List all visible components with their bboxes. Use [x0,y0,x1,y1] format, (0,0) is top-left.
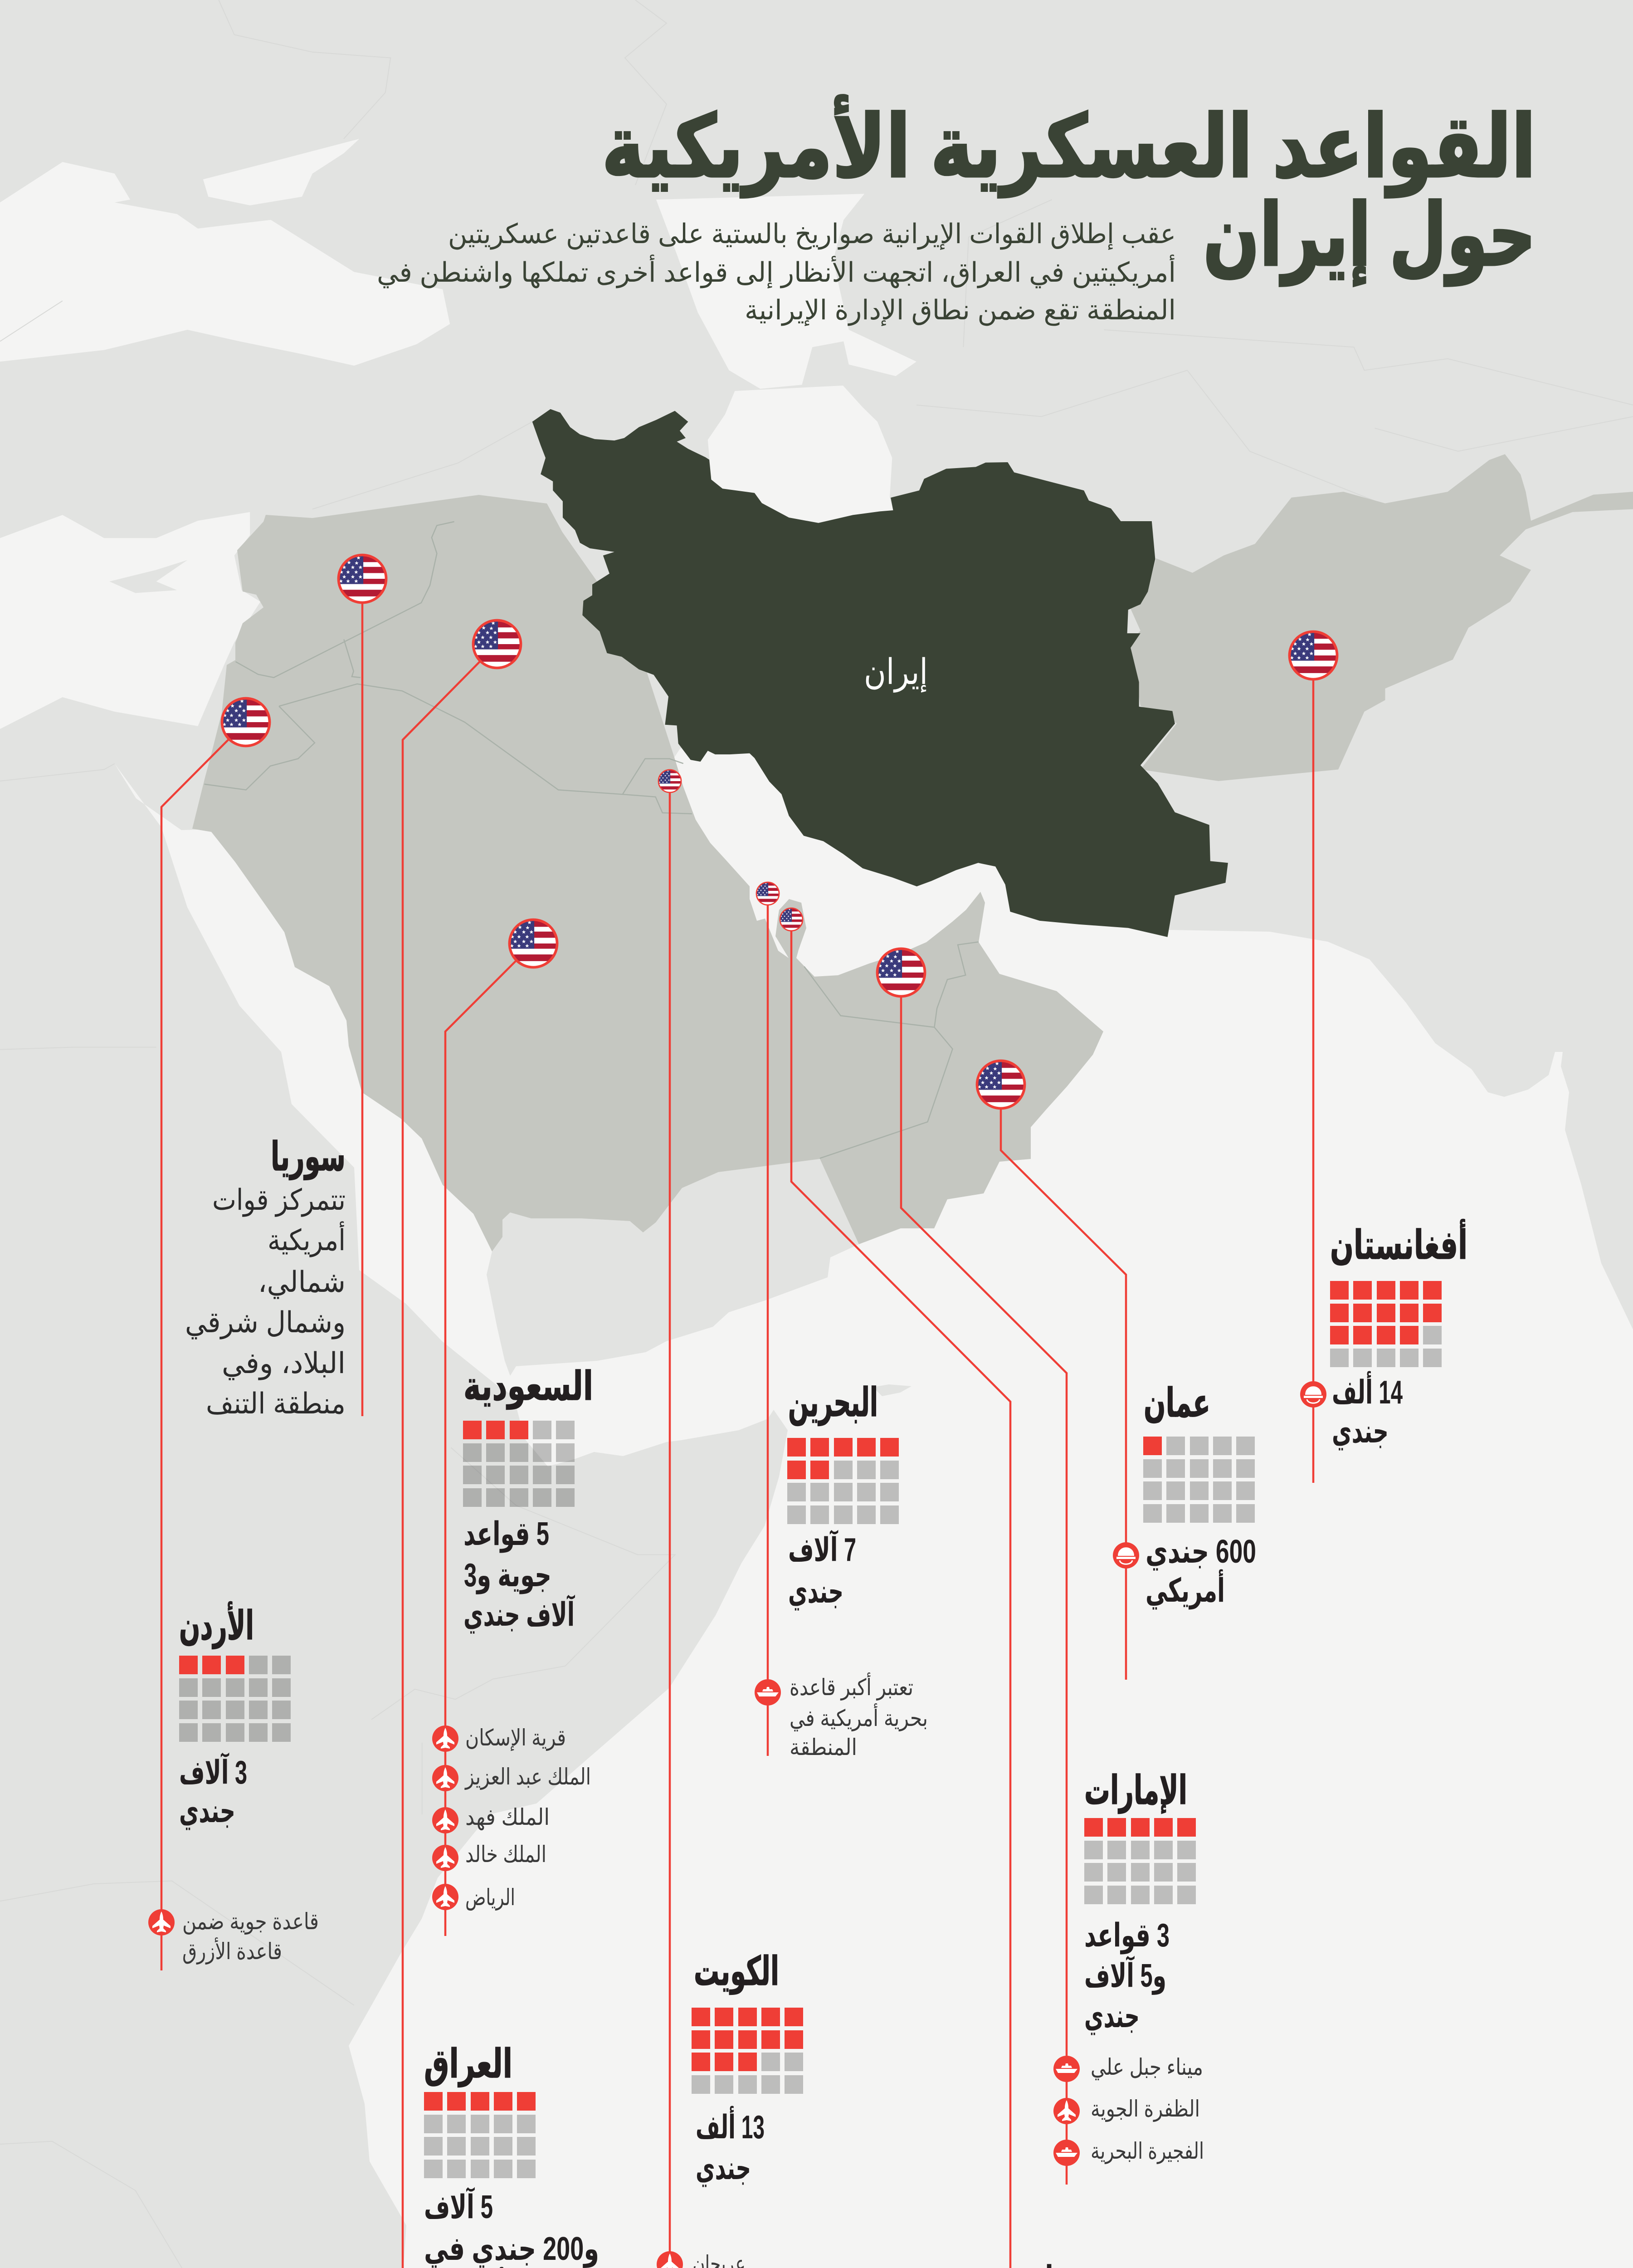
base list: Saudi Arabia: الملك فهد [465,1804,550,1831]
intro text: عقب إطلاق القوات الإيرانية صواريخ بالستية على قاعدتين عسكريتين [448,219,1176,250]
base list: Saudi Arabia: قرية الإسكان [465,1725,566,1751]
troops: Afghanistan: 14 ألف [1332,1371,1403,1411]
heading: Jordan: الأردن [179,1601,254,1649]
heading: Bahrain: البحرين [788,1380,878,1426]
base note: Bahrain: تعتبر أكبر قاعدة [790,1672,913,1701]
flag: Afghanistan [1290,631,1337,679]
icon: jet [148,1909,175,1936]
flag: Kuwait [658,770,681,792]
flag: Bahrain [756,882,779,905]
base note: Bahrain [790,1672,928,1760]
intro text: أمريكيتين في العراق، اتجهت الأنظار إلى قواعد أخرى تملكها واشنطن في [377,254,1176,288]
intro text: المنطقة تقع ضمن نطاق الإدارة الإيرانية [745,295,1176,326]
text: Syria deployment: تتمركز قوات [212,1183,346,1217]
icon: helmet [1300,1381,1326,1408]
waffle chart: Jordan [179,1656,291,1742]
base note: Bahrain: بحرية أمريكية في [790,1703,928,1731]
intro text [377,219,1176,326]
flag: Saudi Arabia [510,920,557,967]
troops: Bahrain: 7 آلاف [788,1530,856,1568]
troops: UAE: 3 قواعد [1084,1917,1170,1955]
flag: Qatar [780,908,803,931]
waffle chart: Saudi Arabia [463,1421,575,1507]
troops: Jordan [179,1752,247,1830]
waffle chart: Bahrain [787,1438,899,1524]
troops: Afghanistan: جندي [1332,1413,1389,1451]
flag: UAE [877,949,925,996]
panel: Kuwait [655,770,854,2268]
panel: Qatar [780,908,1189,2268]
panel: Iraq [388,621,599,2268]
panel: Oman [977,1061,1256,1680]
heading: Oman: عمان [1144,1380,1210,1425]
Afghanistan shape [1130,454,1633,781]
waffle chart: Afghanistan [1330,1281,1442,1367]
heading: Saudi Arabia: السعودية [463,1364,593,1410]
troops: Iraq: 5 آلاف [424,2187,493,2225]
heading: Kuwait: الكويت [694,1949,779,1995]
troops: Iraq: و200 جندي في [424,2231,599,2268]
heading: Iraq: العراق [424,2041,512,2087]
base list: Saudi Arabia [432,1725,591,1911]
troops: Saudi Arabia: آلاف جندي [463,1594,575,1634]
troops: UAE: جندي [1084,1998,1140,2035]
troops: Jordan: جندي [179,1793,235,1830]
waffle chart: Iraq [424,2092,536,2178]
troops: UAE: و5 آلاف [1084,1955,1166,1995]
icon: helmet [1113,1542,1139,1569]
troops: Oman [1146,1534,1256,1610]
flag: Jordan [222,699,269,746]
flag: Syria [338,555,386,602]
base list: UAE [1053,2054,1204,2166]
base list: UAE: الفجيرة البحرية [1091,2138,1204,2164]
text: Syria deployment: أمريكية [268,1221,346,1257]
base list: Saudi Arabia: الملك عبد العزيز [464,1764,591,1790]
waffle chart: Kuwait [692,2008,803,2094]
waffle chart: UAE [1084,1818,1196,1904]
troops: Bahrain [788,1530,856,1611]
Yemen [487,1159,859,1376]
text: Syria deployment [185,1183,346,1420]
troops: Saudi Arabia: جوية و3 [464,1557,551,1594]
base list: UAE: ميناء جبل علي [1091,2054,1203,2080]
panel: Jordan [148,699,319,1970]
base list: UAE: الظفرة الجوية [1091,2096,1200,2122]
highlighted countries: Arabian peninsula and Levant [192,495,1103,1251]
base note: Bahrain: المنطقة [790,1735,857,1760]
panel: UAE [877,949,1204,2185]
base list: Saudi Arabia: الملك خالد [465,1842,546,1867]
troops: UAE [1084,1917,1170,2035]
troops: Iraq [424,2187,599,2268]
troops: Kuwait [696,2106,765,2187]
troops: Saudi Arabia [463,1516,575,1634]
flag: Oman [977,1061,1025,1109]
troops: Kuwait: جندي [696,2150,751,2187]
troops: Afghanistan [1332,1371,1403,1451]
base note: Jordan: قاعدة الأزرق [182,1937,282,1965]
title [602,95,1536,287]
troops: Jordan: 3 آلاف [179,1752,247,1791]
panel: Bahrain [755,882,928,1760]
Iran shape [532,409,1228,937]
troops: Oman: أمريكي [1146,1569,1225,1610]
text: Syria deployment: منطقة التنف [206,1387,346,1420]
base note: Jordan [182,1909,319,1965]
base list: Saudi Arabia: الرياض [465,1885,515,1911]
troops: Oman: 600 جندي [1146,1534,1256,1571]
heading: Afghanistan: أفغانستان [1330,1219,1467,1267]
base note: Jordan: قاعدة جوية ضمن [182,1909,319,1935]
panel: Saudi Arabia [432,920,593,1936]
base list: Kuwait [655,2251,854,2268]
heading: UAE: الإمارات [1084,1768,1187,1814]
troops: Bahrain: جندي [788,1574,843,1611]
flag: Iraq [473,621,521,668]
Socotra [873,1384,912,1396]
waffle chart: Oman [1143,1437,1255,1523]
panel: Afghanistan [1290,631,1467,1483]
panel: Syria [185,555,386,1420]
text: Syria deployment: وشمال شرقي [185,1306,346,1339]
title: حول إيران [1203,187,1536,287]
heading: Syria: سوريا [271,1134,346,1180]
troops: Kuwait: 13 ألف [696,2106,765,2146]
troops: Saudi Arabia: 5 قواعد [463,1516,549,1553]
icon: ship [755,1679,781,1706]
text: Syria deployment: البلاد، وفي [222,1347,346,1380]
text: Syria deployment: شمالي، [258,1266,346,1299]
Iran label: إيران [864,652,928,693]
